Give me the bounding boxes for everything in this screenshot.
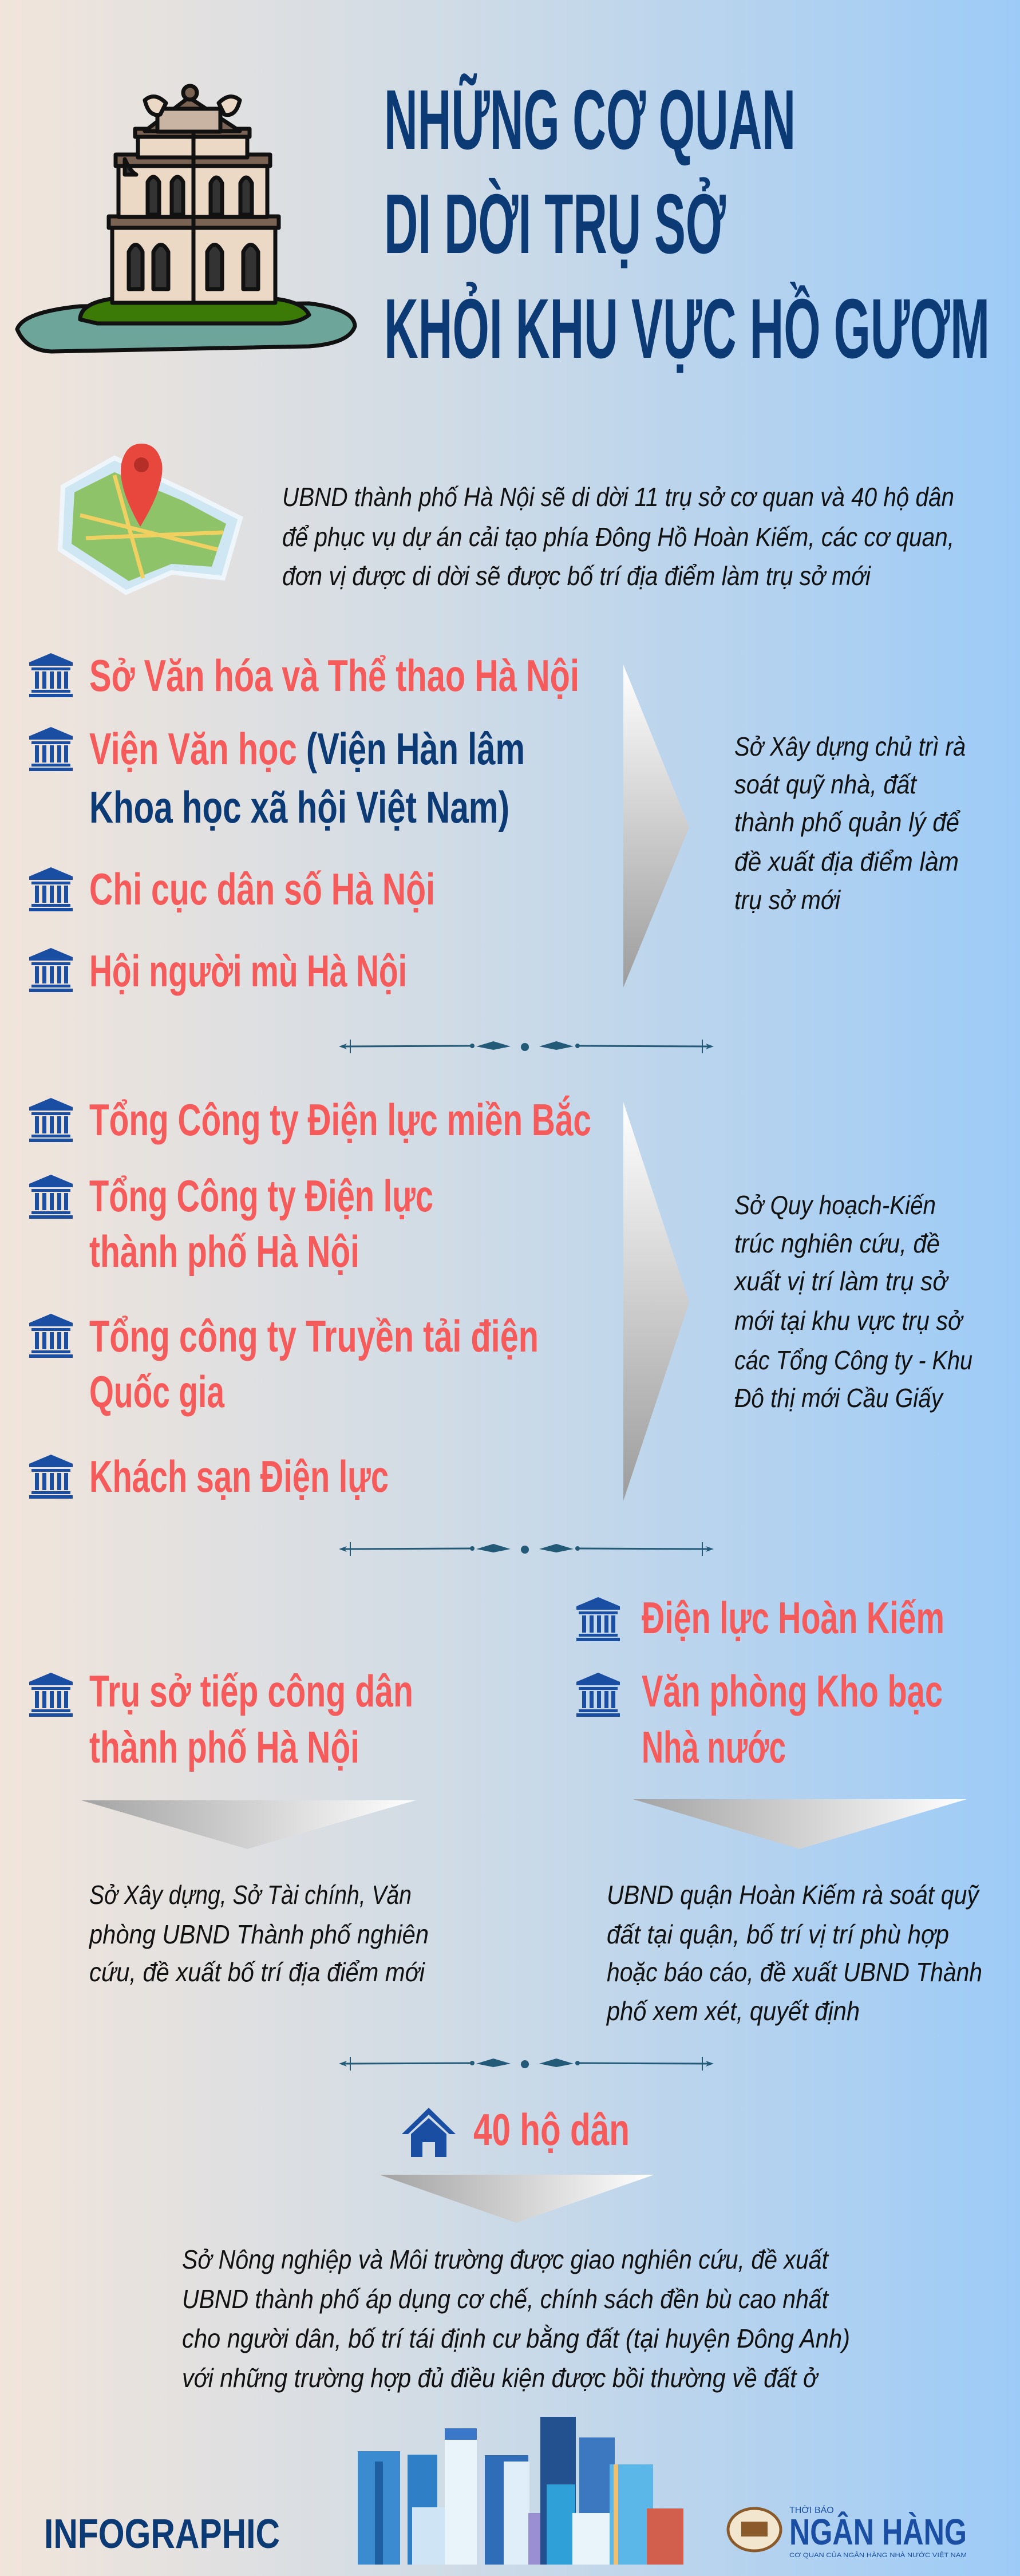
text: left responsibility: Sở Xây dựng, Sở Tài chính, Văn — [89, 1880, 412, 1910]
logo: INFOGRAPHIC: INFOGRAPHIC — [44, 2511, 280, 2557]
icon: turtle tower — [17, 86, 355, 351]
text: households responsibility: cho người dân, bố trí tái định cư bằng đất (tại huyện Đông Anh) — [182, 2324, 850, 2353]
text: households responsibility: UBND thành phố áp dụng cơ chế, chính sách đền bù cao nhất — [182, 2284, 829, 2314]
text: households responsibility: Sở Nông nghiệp và Môi trường được giao nghiên cứu, đề xuất — [182, 2245, 829, 2274]
icon: map pin — [60, 444, 240, 592]
text: households responsibility — [182, 2245, 850, 2393]
text: group 1 responsibility: soát quỹ nhà, đất — [734, 769, 918, 799]
arrow: left down — [81, 1800, 416, 1849]
icon: city skyline — [358, 2417, 683, 2565]
panel: group 2 agencies: thành phố Hà Nội — [89, 1226, 359, 1277]
text: left responsibility — [88, 1880, 429, 1987]
panel: citizen reception: Trụ sở tiếp công dân — [89, 1666, 413, 1716]
panel: group 1 agencies: Sở Văn hóa và Thể thao Hà Nội — [89, 650, 579, 701]
text: group 1 responsibility: đề xuất địa điểm làm — [734, 847, 959, 876]
panel: group 2 agencies: Quốc gia — [89, 1366, 224, 1417]
panel: citizen reception — [29, 1666, 413, 1772]
heading: 40 households — [402, 2104, 630, 2157]
panel: group 1 agencies: Viện Văn học (Viện Hàn lâm — [89, 724, 525, 774]
panel: group 1 agencies: Chi cục dân số Hà Nội — [89, 864, 435, 914]
logo: Thoi bao Ngan hang: NGÂN HÀNG — [789, 2511, 967, 2553]
panel: Hoan Kiem agencies: Nhà nước — [642, 1722, 786, 1772]
heading: 40 households: 40 hộ dân — [473, 2104, 630, 2155]
panel: group 2 agencies: Tổng Công ty Điện lực miền Bắc — [89, 1095, 591, 1145]
arrow: group 1 — [623, 665, 689, 987]
panel: group 1 agencies: Khoa học xã hội Việt Nam) — [89, 782, 509, 832]
intro text — [282, 482, 954, 591]
arrow: group 2 — [623, 1102, 689, 1501]
text: right responsibility: đất tại quận, bố trí vị trí phù hợp — [607, 1919, 949, 1949]
text: right responsibility: hoặc báo cáo, đề xuất UBND Thành — [607, 1957, 982, 1987]
panel: group 2 agencies: Khách sạn Điện lực — [89, 1451, 389, 1502]
text: group 1 responsibility — [734, 732, 966, 915]
text: left responsibility: phòng UBND Thành phố nghiên — [88, 1919, 429, 1949]
text: left responsibility: cứu, đề xuất bố trí địa điểm mới — [89, 1957, 426, 1987]
arrow: right down — [633, 1799, 967, 1849]
text: group 2 responsibility: Sở Quy hoạch-Kiến — [734, 1190, 936, 1220]
intro text: đơn vị được di dời sẽ được bố trí địa điểm làm trụ sở mới — [282, 561, 872, 591]
text: right responsibility: UBND quận Hoàn Kiếm rà soát quỹ — [607, 1880, 981, 1910]
title: DI DỜI TRỤ SỞ — [384, 176, 726, 271]
text: right responsibility: phố xem xét, quyết định — [606, 1996, 860, 2026]
panel: group 2 agencies: Tổng công ty Truyền tải điện — [89, 1311, 539, 1361]
panel: group 1 agencies: Hội người mù Hà Nội — [89, 946, 407, 996]
arrow: households down — [379, 2175, 654, 2223]
text: group 2 responsibility: Đô thị mới Cầu Giấy — [734, 1383, 944, 1413]
text: group 1 responsibility: Sở Xây dựng chủ trì rà — [734, 732, 966, 761]
text: group 2 responsibility: xuất vị trí làm trụ sở — [733, 1266, 949, 1296]
panel: group 2 agencies — [29, 1095, 591, 1502]
text: group 1 responsibility: trụ sở mới — [734, 885, 841, 915]
text: group 2 responsibility: mới tại khu vực trụ sở — [734, 1306, 964, 1336]
text: group 1 responsibility: thành phố quản lý để — [734, 807, 960, 837]
panel: group 1 agencies — [29, 650, 579, 996]
logo: Thoi bao Ngan hang: THỜI BÁO — [789, 2504, 834, 2515]
text: group 2 responsibility — [733, 1190, 972, 1413]
text: right responsibility — [606, 1880, 982, 2026]
panel: Hoan Kiem agencies — [576, 1593, 944, 1772]
text: households responsibility: với những trường hợp đủ điều kiện được bồi thường về đất ở — [182, 2363, 819, 2393]
text: group 2 responsibility: các Tổng Công ty - Khu — [734, 1345, 972, 1375]
logo: Thoi bao Ngan hang: CƠ QUAN CỦA NGÂN HÀNG NHÀ NƯỚC VIỆT NAM — [789, 2551, 967, 2559]
panel: citizen reception: thành phố Hà Nội — [89, 1722, 359, 1772]
panel: group 2 agencies: Tổng Công ty Điện lực — [89, 1171, 433, 1221]
title — [384, 73, 990, 376]
text: group 2 responsibility: trúc nghiên cứu, đề — [734, 1228, 940, 1258]
logo: Thoi bao Ngan hang — [728, 2504, 967, 2559]
